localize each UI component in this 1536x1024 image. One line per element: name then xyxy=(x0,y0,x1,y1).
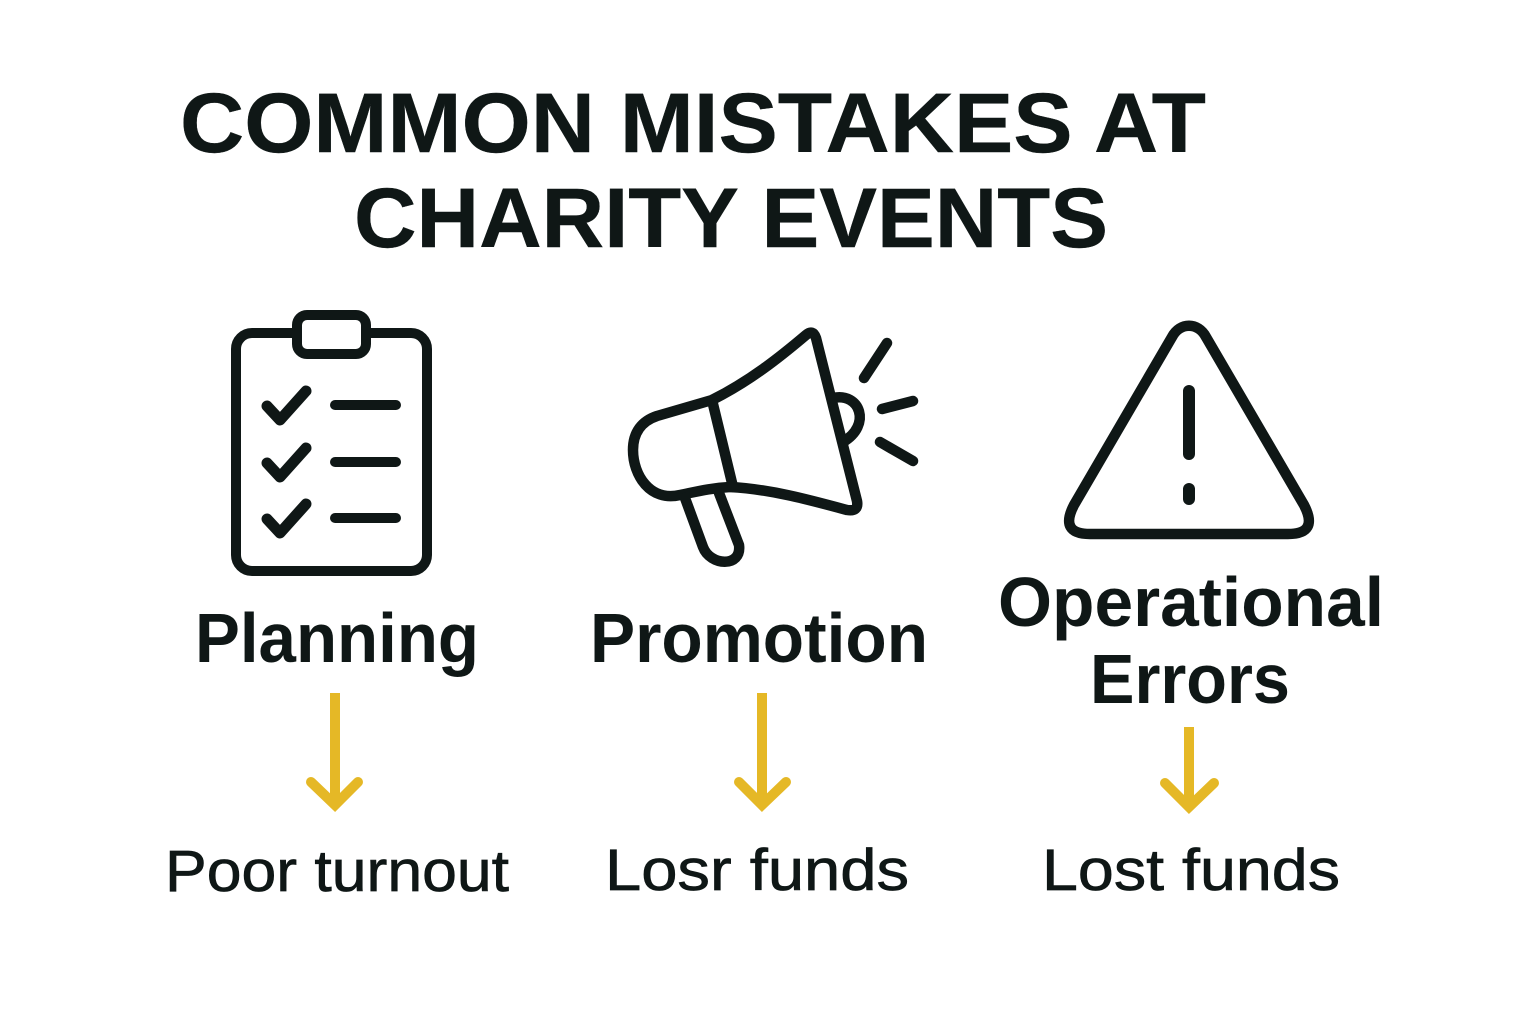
icon: clipboard checklist xyxy=(236,315,427,571)
arrow: promotion xyxy=(739,693,786,805)
icon: megaphone xyxy=(633,333,913,562)
text: Losr funds: Losr funds xyxy=(605,838,909,903)
heading: Promotion: Promotion xyxy=(590,599,928,677)
icon: warning triangle xyxy=(1069,326,1309,534)
text: Lost funds: Lost funds xyxy=(1042,838,1340,903)
title: COMMON MISTAKES AT xyxy=(180,76,1206,170)
heading: Operational Errors: Errors xyxy=(1090,640,1290,718)
arrow: planning xyxy=(311,693,358,805)
heading: Planning: Planning xyxy=(195,599,479,677)
title: CHARITY EVENTS xyxy=(354,171,1108,265)
arrow: operational errors xyxy=(1165,727,1214,807)
heading: Operational Errors: Operational xyxy=(998,563,1384,641)
heading: Operational Errors xyxy=(998,563,1384,718)
title xyxy=(180,76,1206,265)
text: Poor turnout: Poor turnout xyxy=(165,839,509,904)
